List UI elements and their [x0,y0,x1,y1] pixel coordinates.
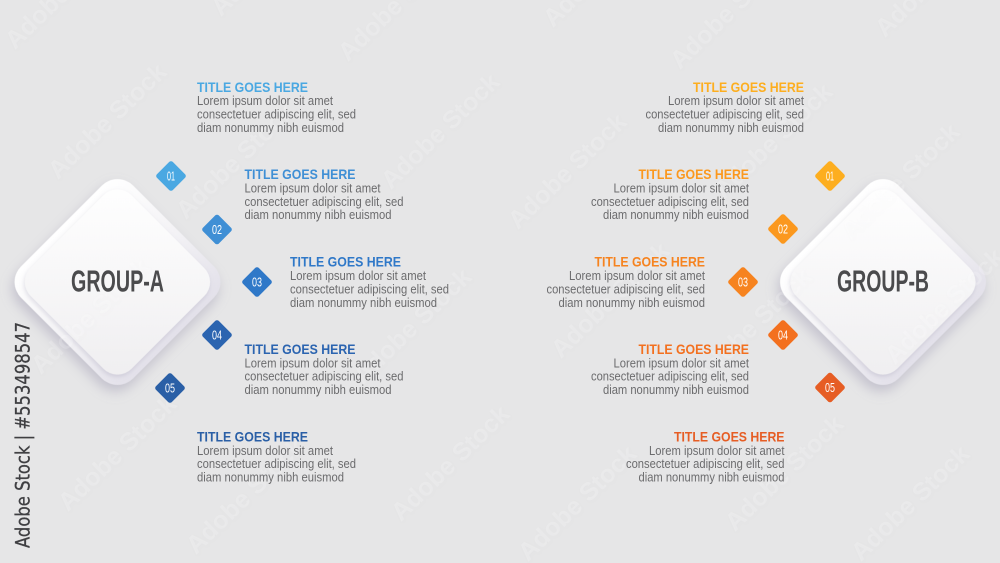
text block: A 03: consectetuer adipiscing elit, sed [290,282,449,296]
text block: B 01: Lorem ipsum dolor sit amet [668,94,804,108]
text block: B 01: TITLE GOES HERE [693,79,804,95]
text block: A 01: Lorem ipsum dolor sit amet [197,94,333,108]
icon: badge A 01 [155,160,187,192]
text block: A 05: Lorem ipsum dolor sit amet [197,444,333,458]
icon: badge B 02: 02 [778,222,788,237]
text block: B 02 [591,166,749,222]
icon: badge A 03: 03 [252,275,262,290]
heading: GROUP-B: GROUP-B [837,264,929,298]
text block: A 01: consectetuer adipiscing elit, sed [197,108,356,122]
icon: badge B 03: 03 [738,275,748,290]
panel: group A diamond [5,170,230,394]
text block: B 05: Lorem ipsum dolor sit amet [649,444,785,458]
text block: A 02: TITLE GOES HERE [244,166,356,182]
text block: B 05: consectetuer adipiscing elit, sed [626,457,785,471]
watermark pattern: Adobe Stock [26,253,155,379]
icon: badge B 03 [727,266,759,298]
text block: B 02: consectetuer adipiscing elit, sed [591,195,749,209]
text block: B 01: consectetuer adipiscing elit, sed [646,108,804,122]
text block: B 01 [646,79,804,135]
text block: A 04: diam nonummy nibh euismod [244,383,392,397]
text block: A 04: Lorem ipsum dolor sit amet [244,356,381,370]
watermark pattern: Adobe Stock [171,98,300,224]
watermark pattern: Adobe Stock [513,440,642,563]
text block: B 03: consectetuer adipiscing elit, sed [546,282,705,296]
watermark pattern: Adobe Stock [503,108,632,234]
text block: B 04: diam nonummy nibh euismod [603,383,749,397]
icon: badge B 01 [814,160,846,192]
text block: A 05: TITLE GOES HERE [197,428,308,444]
text block: B 03 [546,254,705,310]
watermark pattern: Adobe Stock [836,118,965,244]
text block: B 05: diam nonummy nibh euismod [638,470,785,484]
heading: GROUP-A: GROUP-A [71,264,164,298]
text block: A 01: TITLE GOES HERE [197,79,308,95]
icon: badge B 04: 04 [778,328,788,343]
text block: A 05 [197,428,356,484]
icon: badge A 03 [241,266,273,298]
text block: A 01: diam nonummy nibh euismod [197,121,344,135]
text block: A 02: diam nonummy nibh euismod [244,208,392,222]
icon: badge A 01: 01 [167,169,175,184]
icon: badge A 04 [201,319,233,351]
text block: B 05: TITLE GOES HERE [674,428,784,444]
text block: A 05: diam nonummy nibh euismod [197,470,344,484]
icon: badge A 02: 02 [212,222,222,237]
text block: A 01 [197,79,356,135]
text block: A 02: Lorem ipsum dolor sit amet [244,182,381,196]
text block: B 02: diam nonummy nibh euismod [603,208,749,222]
panel: group B diamond [771,170,995,394]
text block: A 02 [244,166,404,222]
text block: A 03: TITLE GOES HERE [290,254,401,270]
text block: B 02: Lorem ipsum dolor sit amet [614,182,749,196]
icon: badge A 05: 05 [165,381,175,396]
text block: A 03 [290,254,449,310]
watermark pattern: Adobe Stock [43,58,172,184]
icon: badge A 02 [201,214,233,245]
watermark pattern: Adobe Stock [709,78,838,204]
text block: B 04: TITLE GOES HERE [638,341,749,357]
watermark pattern: Adobe Stock [376,68,505,194]
stock id text: Adobe Stock | #553498547 [12,322,34,548]
watermark pattern: Adobe Stock [546,237,675,363]
text block: A 04: TITLE GOES HERE [244,341,356,357]
watermark pattern: Adobe Stock [720,410,849,536]
watermark pattern: Adobe Stock [181,433,310,559]
watermark pattern: Adobe Stock [53,390,182,516]
text block: A 03: Lorem ipsum dolor sit amet [290,269,426,283]
text block: B 01: diam nonummy nibh euismod [658,121,804,135]
text block: B 03: Lorem ipsum dolor sit amet [569,269,705,283]
icon: badge B 05 [814,372,846,403]
text block: B 04 [591,341,749,397]
text block: B 04: Lorem ipsum dolor sit amet [614,356,749,370]
text block: A 04 [244,341,404,397]
icon: badge B 05: 05 [825,380,835,395]
watermark pattern: Adobe Stock [688,263,817,389]
icon: badge B 02 [767,213,799,245]
text block: B 03: TITLE GOES HERE [594,254,705,270]
text block: B 04: consectetuer adipiscing elit, sed [591,370,749,384]
text block: A 04: consectetuer adipiscing elit, sed [244,370,404,384]
text block: B 02: TITLE GOES HERE [638,166,749,182]
icon: badge B 04 [767,319,799,351]
text block: A 03: diam nonummy nibh euismod [290,296,437,310]
icon: badge B 01: 01 [826,169,834,184]
text block: B 03: diam nonummy nibh euismod [558,296,705,310]
text block: A 02: consectetuer adipiscing elit, sed [244,195,404,209]
watermark pattern: Adobe Stock [348,263,477,389]
watermark pattern: Adobe Stock [386,400,515,526]
icon: badge A 04: 04 [212,328,222,343]
text block: A 05: consectetuer adipiscing elit, sed [197,457,356,471]
text block: B 05 [626,428,785,484]
watermark pattern: Adobe Stock [846,440,975,563]
icon: badge A 05 [154,372,186,404]
